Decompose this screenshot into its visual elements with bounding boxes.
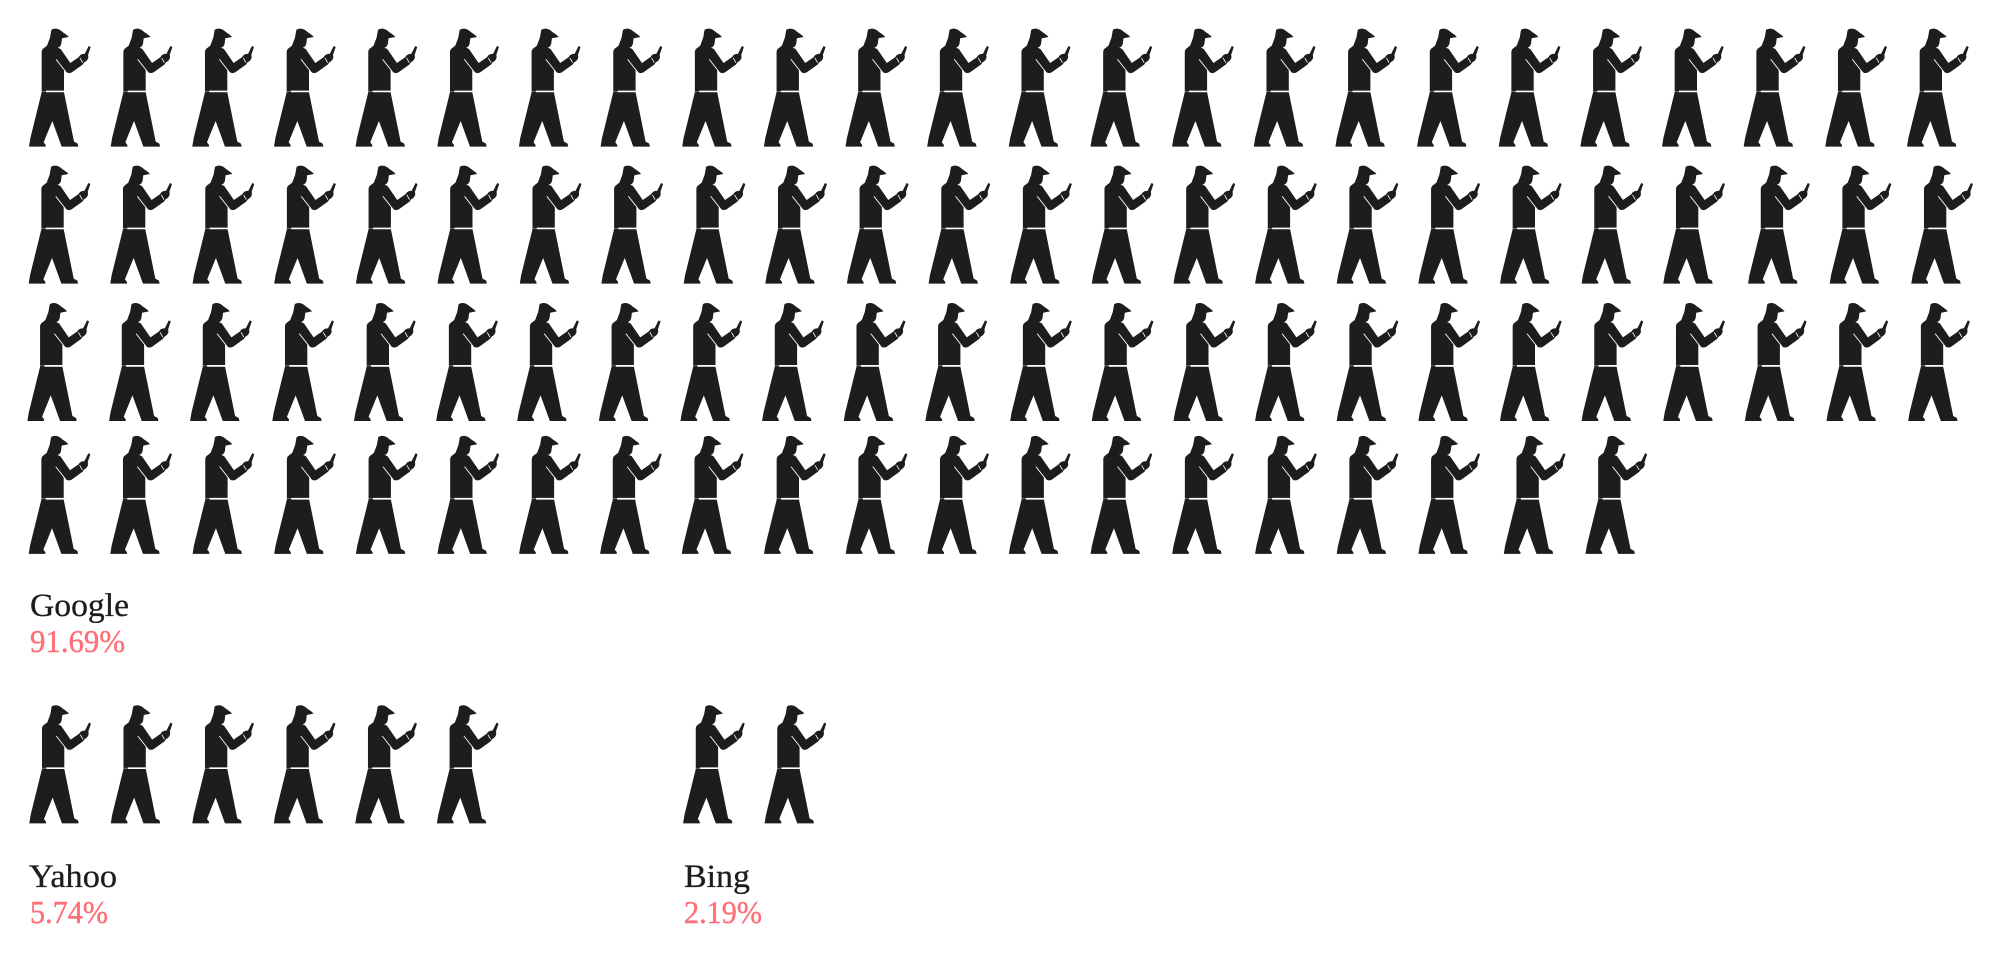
pictogram rows: Google (27, 29, 1973, 554)
icon: person with phone (517, 303, 579, 421)
label: Google: Google (30, 588, 129, 624)
icon: person with phone (599, 303, 661, 421)
icon: person with phone (111, 29, 172, 147)
icon: person with phone (1500, 166, 1562, 284)
icon: person with phone (1504, 436, 1565, 554)
row 1 of people icons (29, 29, 1969, 147)
icon: person with phone (356, 166, 418, 284)
icon: person with phone (274, 166, 336, 284)
icon: person with phone (29, 705, 91, 823)
icon: person with phone (1091, 436, 1152, 554)
icon: person with phone (846, 436, 907, 554)
pictogram row: Yahoo (29, 705, 499, 823)
icon: person with phone (1745, 303, 1807, 421)
icon: person with phone (438, 166, 499, 284)
icon: person with phone (844, 303, 905, 421)
icon: person with phone (110, 436, 172, 554)
icon: person with phone (355, 705, 417, 823)
icon: person with phone (1174, 166, 1235, 284)
icon: person with phone (438, 436, 499, 554)
icon: person with phone (1586, 436, 1647, 554)
icon: person with phone (27, 303, 89, 421)
icon: person with phone (764, 29, 826, 147)
label: Bing: Bing (684, 859, 750, 895)
icon: person with phone (1748, 166, 1810, 284)
label: Yahoo: Yahoo (29, 859, 117, 895)
icon: person with phone (1911, 166, 1973, 284)
icon: person with phone (1825, 29, 1887, 147)
pictogram row: Bing (683, 705, 826, 823)
row 4 of people icons (29, 436, 1647, 554)
row 3 of people icons (27, 303, 1970, 421)
icon: person with phone (1337, 166, 1398, 284)
icon: person with phone (437, 29, 499, 147)
icon: person with phone (1090, 29, 1152, 147)
icon: person with phone (192, 705, 254, 823)
icon: person with phone (1417, 29, 1479, 147)
icon: person with phone (272, 303, 334, 421)
icon: person with phone (600, 436, 662, 554)
icon: person with phone (109, 303, 171, 421)
value: Yahoo share: 5.74% (30, 894, 108, 930)
icon: person with phone (765, 166, 827, 284)
icon: person with phone (927, 436, 989, 554)
icon: person with phone (1500, 303, 1562, 421)
icon: person with phone (1009, 29, 1070, 147)
icon: person with phone (1010, 166, 1072, 284)
icon: person with phone (1744, 29, 1805, 147)
icon: person with phone (1172, 436, 1234, 554)
icon: person with phone (765, 705, 826, 823)
icon: person with phone (274, 29, 336, 147)
icon: person with phone (1663, 166, 1725, 284)
icon: person with phone (682, 29, 744, 147)
icon: person with phone (1092, 303, 1153, 421)
icon: person with phone (680, 303, 742, 421)
icon: person with phone (1174, 303, 1235, 421)
icon: person with phone (1663, 303, 1725, 421)
icon: person with phone (683, 705, 745, 823)
icon: person with phone (1337, 303, 1398, 421)
icon: person with phone (437, 705, 499, 823)
icon: person with phone (519, 436, 581, 554)
icon: person with phone (354, 303, 416, 421)
icon: person with phone (1499, 29, 1560, 147)
panel: Bing (683, 705, 826, 930)
icon: person with phone (190, 303, 252, 421)
icon: person with phone (601, 29, 662, 147)
icon: person with phone (274, 436, 336, 554)
icon: person with phone (1254, 29, 1315, 147)
icon: person with phone (1010, 303, 1072, 421)
row 2 of people icons (29, 166, 1973, 284)
icon: person with phone (193, 166, 254, 284)
icon: person with phone (762, 303, 824, 421)
icon: person with phone (356, 29, 417, 147)
icon: person with phone (436, 303, 498, 421)
icon: person with phone (1335, 29, 1397, 147)
icon: person with phone (520, 166, 581, 284)
icon: person with phone (1255, 436, 1317, 554)
icon: person with phone (601, 166, 663, 284)
icon: person with phone (29, 436, 90, 554)
icon: person with phone (682, 436, 743, 554)
panel: Yahoo (29, 705, 499, 930)
icon: person with phone (110, 166, 172, 284)
icon: person with phone (929, 166, 990, 284)
icon: person with phone (1907, 29, 1969, 147)
icon: person with phone (1418, 436, 1480, 554)
icon: person with phone (111, 705, 172, 823)
icon: person with phone (1580, 29, 1642, 147)
icon: person with phone (519, 29, 581, 147)
icon: person with phone (1255, 303, 1317, 421)
icon: person with phone (1582, 303, 1643, 421)
icon: person with phone (192, 29, 254, 147)
icon: person with phone (764, 436, 826, 554)
icon: person with phone (1009, 436, 1071, 554)
icon: person with phone (925, 303, 987, 421)
icon: person with phone (274, 705, 335, 823)
icon: person with phone (1255, 166, 1317, 284)
icon: person with phone (193, 436, 254, 554)
icon: person with phone (847, 166, 909, 284)
icon: person with phone (846, 29, 907, 147)
icon: person with phone (1337, 436, 1398, 554)
value: Google share: 91.69% (30, 623, 125, 659)
icon: person with phone (29, 166, 90, 284)
value: Bing share: 2.19% (684, 894, 762, 930)
icon: person with phone (1582, 166, 1643, 284)
icon: person with phone (1418, 303, 1480, 421)
icon: person with phone (356, 436, 418, 554)
icon: person with phone (1830, 166, 1891, 284)
icon: person with phone (684, 166, 745, 284)
icon: person with phone (1172, 29, 1234, 147)
icon: person with phone (29, 29, 91, 147)
icon: person with phone (1908, 303, 1970, 421)
panel: Google (27, 29, 1973, 659)
icon: person with phone (1662, 29, 1724, 147)
icon: person with phone (927, 29, 989, 147)
icon: person with phone (1826, 303, 1888, 421)
icon: person with phone (1418, 166, 1480, 284)
icon: person with phone (1092, 166, 1153, 284)
